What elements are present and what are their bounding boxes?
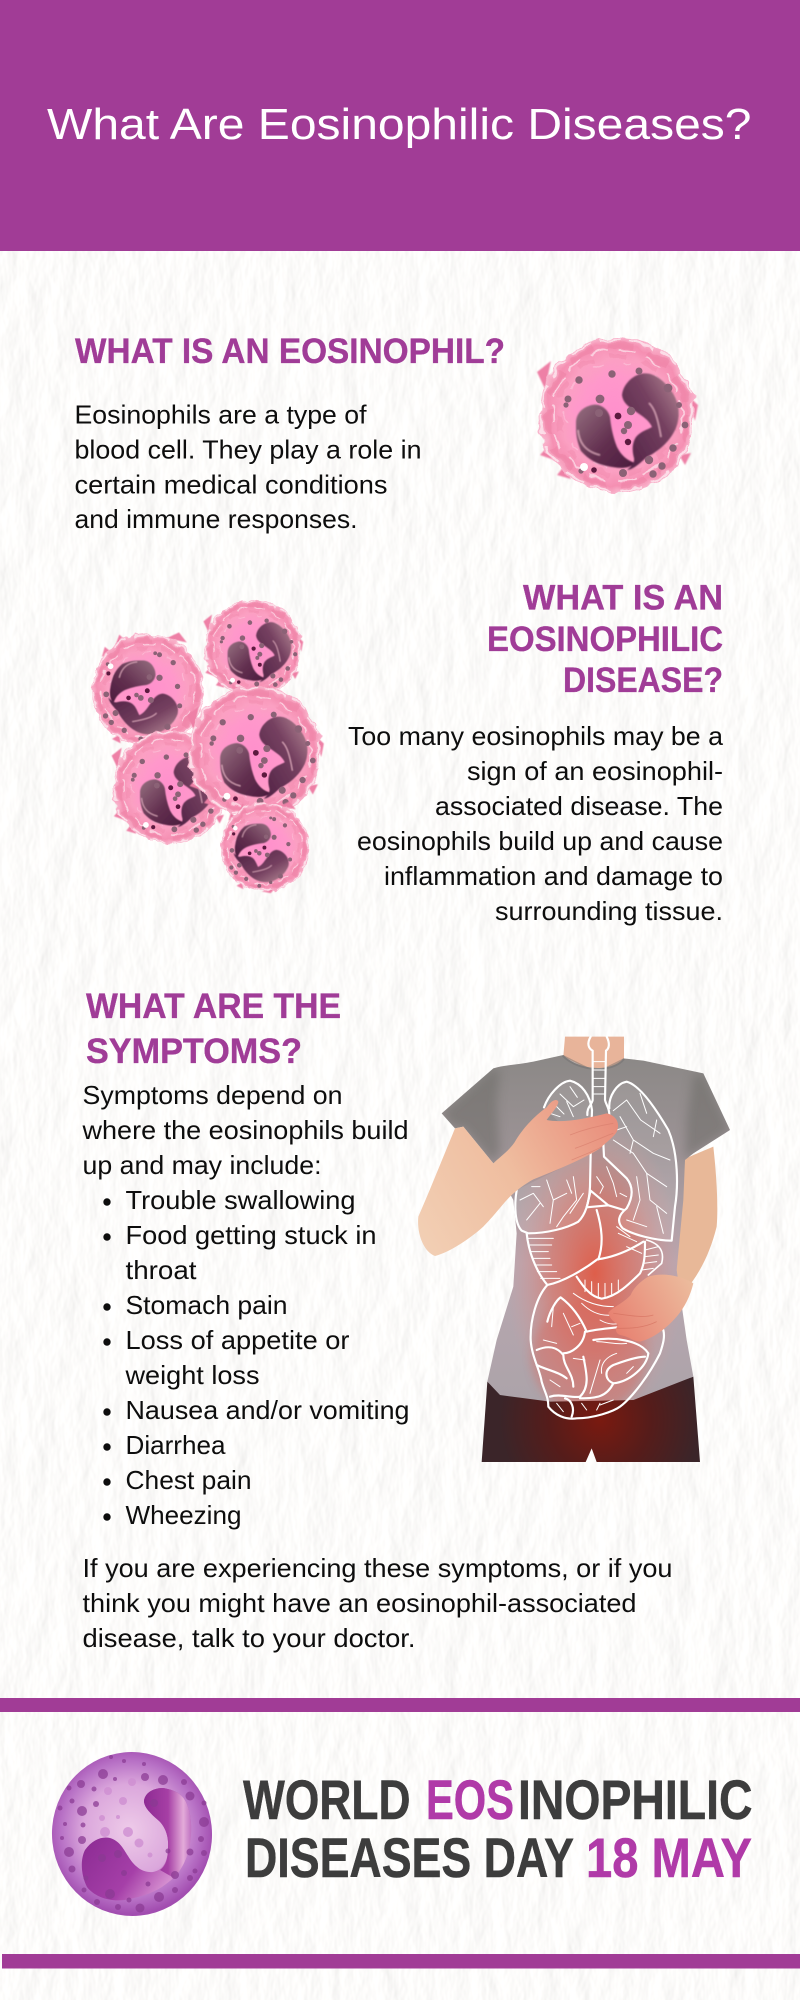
symptom list: Stomach pain xyxy=(126,1290,288,1320)
panel: what is an eosinophil xyxy=(74,332,698,534)
panel: what is an eosinophilic disease xyxy=(92,578,724,926)
intro text: Symptoms depend on xyxy=(82,1080,342,1110)
text block: and immune responses. xyxy=(74,504,358,534)
text block xyxy=(74,400,422,534)
symptom list: throat xyxy=(126,1255,197,1285)
heading xyxy=(487,578,723,700)
intro text xyxy=(81,1080,409,1180)
closing advice text: think you might have an eosinophil-associated xyxy=(82,1588,636,1618)
header banner xyxy=(0,0,800,251)
logo wordmark: DISEASES DAY xyxy=(245,1827,574,1889)
icon: purple cell xyxy=(44,1744,220,1924)
symptom list: Diarrhea xyxy=(126,1430,226,1460)
text block xyxy=(348,721,724,926)
text block: eosinophils build up and cause xyxy=(357,826,723,856)
symptom list: Food getting stuck in xyxy=(126,1220,376,1250)
symptom list xyxy=(103,1185,410,1530)
heading: EOSINOPHILIC xyxy=(487,620,723,659)
logo wordmark xyxy=(243,1769,752,1889)
logo: world eosinophilic diseases day xyxy=(44,1744,752,1924)
logo wordmark: INOPHILIC xyxy=(518,1769,752,1831)
icon: single eosinophil cell xyxy=(537,337,698,493)
heading: SYMPTOMS? xyxy=(86,1032,302,1071)
logo wordmark: EOS xyxy=(426,1769,514,1831)
text block: Eosinophils are a type of xyxy=(74,400,367,430)
heading: WHAT ARE THE xyxy=(86,987,341,1026)
text block: sign of an eosinophil- xyxy=(467,756,723,786)
heading xyxy=(86,987,341,1071)
text block: Too many eosinophils may be a xyxy=(348,721,724,751)
closing advice text xyxy=(82,1553,672,1653)
text block: blood cell. They play a role in xyxy=(74,434,422,464)
symptom list: Nausea and/or vomiting xyxy=(126,1395,410,1425)
heading: WHAT IS AN xyxy=(523,578,723,618)
symptom list: Trouble swallowing xyxy=(126,1185,356,1215)
symptom list: weight loss xyxy=(124,1360,259,1390)
text block: certain medical conditions xyxy=(74,470,388,500)
text block: surrounding tissue. xyxy=(495,896,723,926)
divider bar bottom xyxy=(2,1954,800,1968)
logo wordmark: 18 MAY xyxy=(586,1827,752,1889)
heading: DISEASE? xyxy=(563,661,723,700)
closing advice text: disease, talk to your doctor. xyxy=(82,1623,416,1653)
symptom list: Chest pain xyxy=(126,1465,252,1495)
icon: cluster of eosinophil cells xyxy=(92,600,324,893)
heading: WHAT IS AN EOSINOPHIL? xyxy=(75,332,505,371)
closing advice text: If you are experiencing these symptoms, or if you xyxy=(82,1553,672,1583)
symptom list: Wheezing xyxy=(126,1500,242,1530)
symptom list: Loss of appetite or xyxy=(126,1325,350,1355)
logo wordmark: WORLD xyxy=(243,1769,410,1831)
title: What Are Eosinophilic Diseases? xyxy=(47,101,751,149)
panel: symptoms xyxy=(81,987,730,1653)
illustration: person with organ overlay xyxy=(418,1037,730,1462)
intro text: where the eosinophils build xyxy=(81,1115,409,1145)
divider bar top xyxy=(0,1698,800,1712)
text block: inflammation and damage to xyxy=(384,861,723,891)
intro text: up and may include: xyxy=(82,1150,322,1180)
text block: associated disease. The xyxy=(435,791,723,821)
